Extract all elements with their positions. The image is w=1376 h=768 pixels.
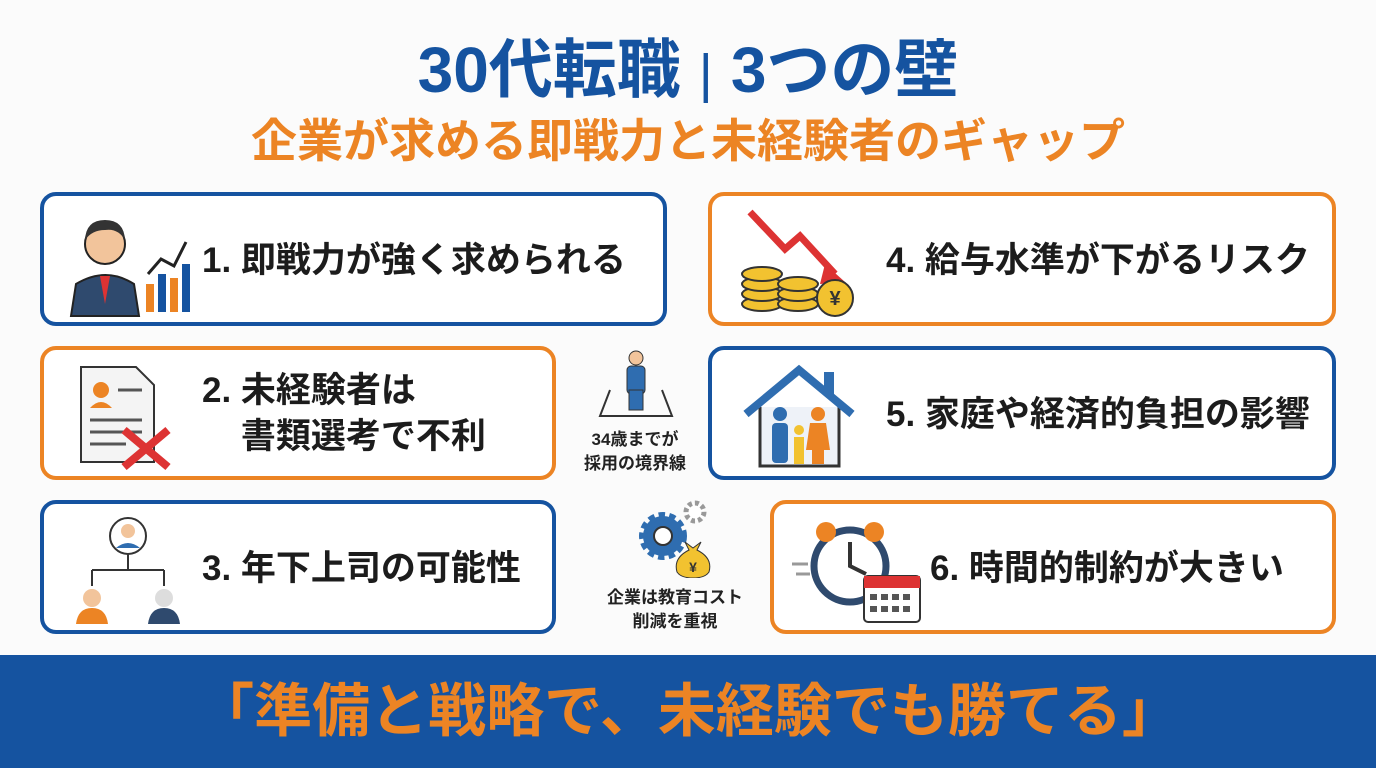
text: 削減を重視 bbox=[632, 612, 718, 631]
icon: org chart bbox=[76, 517, 180, 624]
text: 4. 給与水準が下がるリスク bbox=[886, 241, 1310, 280]
callout: education cost bbox=[607, 500, 743, 631]
text: 企業は教育コスト bbox=[607, 588, 743, 607]
icon: document x bbox=[80, 366, 170, 470]
panel: 3 bbox=[40, 500, 556, 634]
icon: house family bbox=[744, 364, 854, 468]
callout: age 34 bbox=[584, 350, 686, 473]
icon: gears money: ¥ bbox=[689, 559, 697, 575]
panel: 5 bbox=[708, 346, 1336, 480]
text bbox=[584, 430, 686, 473]
icon: coins down bbox=[741, 210, 854, 317]
text: 5. 家庭や経済的負担の影響 bbox=[886, 395, 1310, 434]
text: 1. 即戦力が強く求められる bbox=[202, 241, 626, 280]
text bbox=[202, 371, 486, 456]
text: 34歳までが bbox=[592, 430, 678, 449]
text: 採用の境界線 bbox=[584, 454, 686, 473]
icon: gears money bbox=[639, 500, 710, 578]
icon: coins down: ¥ bbox=[829, 288, 841, 310]
panel: 4 bbox=[708, 192, 1336, 326]
slogan: 「準備と戦略で、未経験でも勝てる」 bbox=[196, 679, 1180, 744]
title: 30代転職 | 3つの壁 bbox=[418, 34, 958, 106]
text: 6. 時間的制約が大きい bbox=[930, 549, 1284, 588]
panel: 1 bbox=[40, 192, 667, 326]
text bbox=[607, 588, 743, 631]
subtitle: 企業が求める即戦力と未経験者のギャップ bbox=[251, 115, 1125, 167]
icon: person standing bbox=[598, 350, 674, 417]
icon: businessman chart bbox=[70, 220, 190, 317]
panel: 2 bbox=[40, 346, 556, 480]
bottom banner bbox=[0, 655, 1376, 768]
icon: clock calendar bbox=[792, 522, 921, 623]
text: 2. 未経験者は bbox=[202, 371, 416, 410]
text: 書類選考で不利 bbox=[241, 416, 486, 456]
panel: 6 bbox=[770, 500, 1336, 634]
text: 3. 年下上司の可能性 bbox=[202, 549, 521, 588]
